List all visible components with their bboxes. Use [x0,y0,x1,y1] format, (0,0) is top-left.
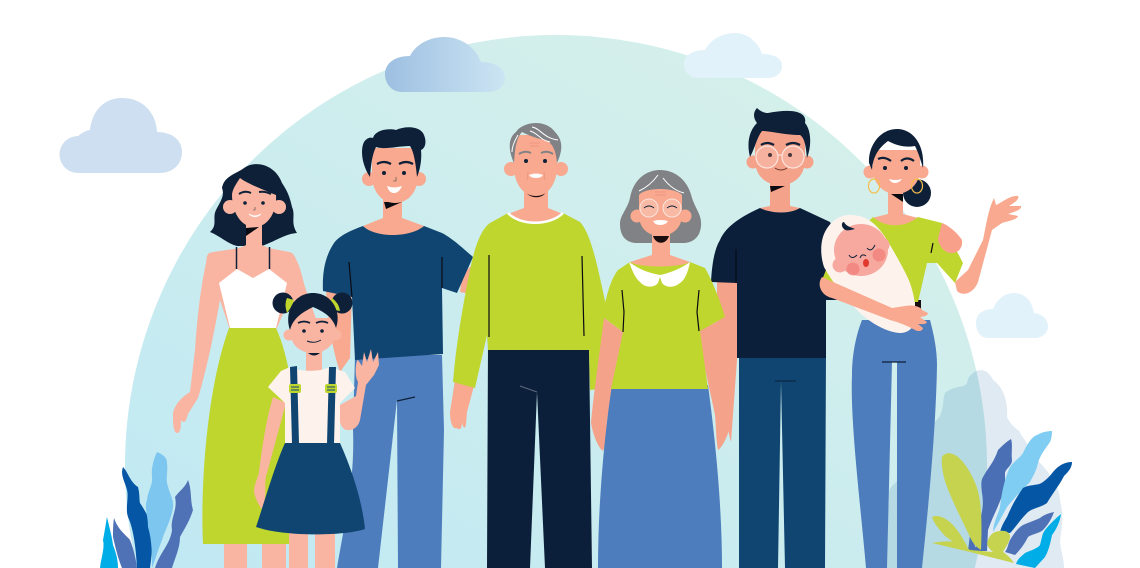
cloud: right small [976,293,1048,338]
face features [298,322,328,356]
upper arm [938,223,962,253]
face [755,130,805,185]
neck [760,180,800,212]
arms [591,318,730,451]
face [290,318,336,353]
plants: bottom right [932,431,1072,568]
jeans [337,355,444,568]
background dome [125,35,987,568]
ears [746,156,814,168]
neck [306,345,322,375]
lime skirt [202,328,295,544]
leaf: dark blue [1000,462,1072,533]
hair highlights [639,175,684,193]
leaf: small lime [932,516,968,548]
blouse [603,262,725,389]
trousers [487,345,592,568]
sweater lines [489,255,584,337]
blouse lines [622,290,699,332]
baby wrap [821,215,915,333]
neck shadow [891,194,903,202]
leaf: mid blue [1005,512,1054,555]
cloud: top left [59,98,182,173]
ears [504,162,568,176]
pocket line [397,397,415,401]
face features [644,192,677,225]
buckles [289,384,337,393]
glasses [756,146,804,168]
face features [377,162,413,193]
jeans [739,352,826,568]
left arm and hand [450,380,474,429]
jeans [852,320,937,568]
earrings [868,179,922,193]
raised forearm and hand [955,196,1021,294]
neck [508,185,563,223]
hair [288,293,338,330]
baby face [832,224,890,276]
baby cheeks [846,248,886,276]
right forearm [460,262,475,295]
legs [289,532,335,568]
belt [915,300,921,310]
right arm and hand [340,349,379,430]
left arm [254,397,286,510]
arm [717,280,737,442]
neck [630,232,690,280]
face [223,178,286,227]
person: girl in navy pinafore [254,292,379,568]
leaf: blue [113,518,137,568]
face features [239,192,271,216]
baby face features [849,245,875,258]
face features [761,143,800,170]
hair buns [272,292,352,314]
person: grandmother [591,170,730,568]
neck [363,195,424,236]
hair [869,129,923,170]
grey hair [620,170,701,243]
skirt [256,443,365,534]
ears [284,330,342,340]
trouser line [775,380,796,382]
shirt [711,208,838,358]
arm behind [326,290,352,372]
neck shadow [524,189,547,197]
hair [210,164,297,246]
collar [629,262,690,287]
face [372,148,418,203]
sleeve lines [349,257,442,297]
leaf: cyan [1016,514,1061,568]
face [639,189,682,236]
person: man in blue T-shirt [323,127,475,568]
neck [872,185,918,226]
background tree: right [877,370,1064,568]
person: woman holding baby [820,129,1021,568]
straps [236,247,270,269]
neck shadow [246,227,259,236]
leaf: cyan [100,517,118,568]
person: grandfather [450,123,606,568]
person: woman in white top and lime skirt [173,164,325,568]
hair highlights [512,127,558,152]
sleeve line [735,249,737,283]
hair bun [903,179,931,207]
trouser line [882,361,906,363]
leaf: blue [968,439,1012,551]
leaf: light blue [146,452,173,568]
glasses [640,199,681,217]
arms [173,253,325,433]
ears [864,166,928,178]
suspenders [290,366,336,444]
leaf: ground lime [932,531,1014,563]
skirt [598,385,722,568]
leaf: light blue [993,431,1052,532]
lime hair bands [286,298,340,313]
neck shadow [384,202,402,209]
face features [878,158,914,183]
leaf: blue right [155,480,193,568]
shirt [268,367,355,443]
ears [362,172,426,186]
grey hair [510,123,561,163]
neck shadow [770,186,785,192]
ears [630,210,692,222]
legs [224,540,286,568]
holding arm and hand [820,277,928,331]
leaf: dark blue [122,467,152,568]
baby hair [842,222,855,230]
hair [362,127,425,177]
person: man in navy T-shirt [711,108,838,568]
sweater [453,213,606,390]
leaf: big lime [942,453,981,550]
cloud: top centre [385,37,505,92]
sleeve line [931,243,933,253]
face [873,150,920,194]
baby mouth [863,259,869,267]
face features [519,143,553,180]
collar [508,213,563,223]
shirt [822,217,963,302]
cloud: top right of dome [684,33,782,78]
neck and chest [206,222,297,330]
white top [219,269,287,328]
face [514,135,557,196]
hair [748,108,810,158]
plants: bottom left [100,452,193,568]
trouser crease [520,386,537,392]
neck shadow [653,236,669,243]
shirt [323,226,473,360]
